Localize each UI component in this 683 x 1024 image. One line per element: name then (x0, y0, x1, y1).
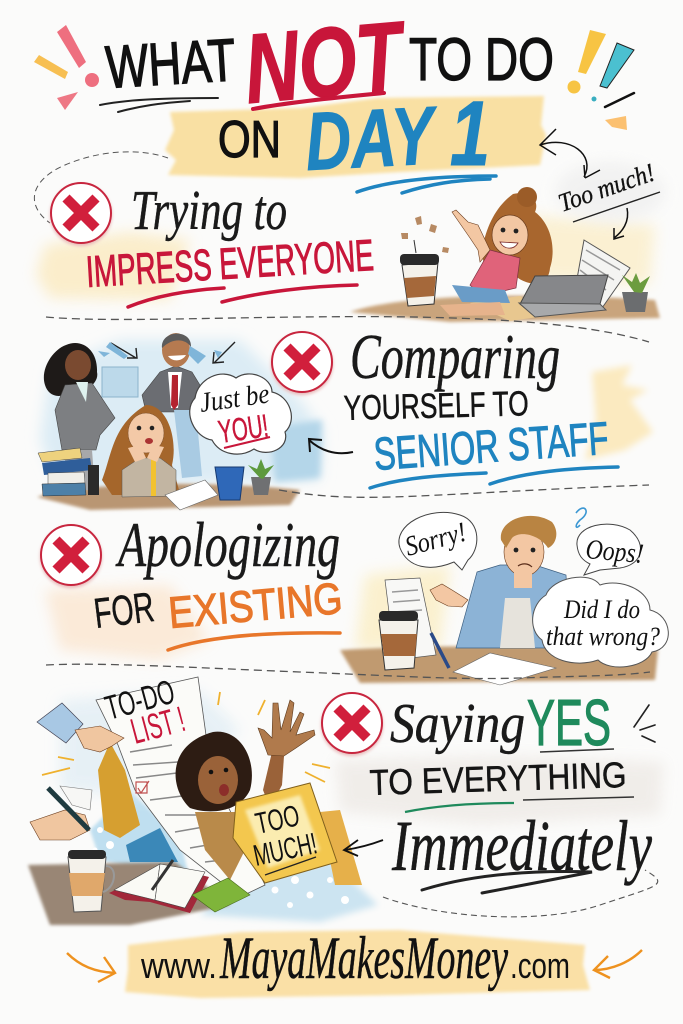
dashed loop (34, 152, 168, 223)
torso pink shirt (470, 250, 520, 296)
blue office wash (40, 340, 322, 490)
heading: existing: EXISTING (167, 574, 344, 638)
window (270, 420, 322, 482)
icon: red x badge (50, 183, 112, 246)
arrow to title (540, 129, 600, 178)
hair bun (517, 187, 537, 207)
arrow to folder (344, 840, 383, 856)
hair (176, 732, 252, 811)
coffee cup (379, 611, 418, 670)
coffee cup (68, 850, 114, 912)
alert sparks (42, 692, 330, 782)
blue cup (215, 467, 244, 500)
office screen (102, 367, 138, 397)
coffee cup (400, 240, 439, 306)
heading: impress everyone: IMPRESS EVERYONE (85, 231, 375, 297)
did i do that wrong bubble (533, 577, 668, 667)
stack of books (38, 448, 99, 496)
desk (340, 646, 658, 683)
title block (100, 0, 554, 193)
blue skirt (126, 828, 178, 862)
section divider 1 (46, 317, 649, 342)
list lines (130, 745, 240, 862)
jeans and legs (452, 285, 510, 303)
face (198, 756, 238, 804)
pen (431, 633, 449, 668)
grey bubble shade (555, 162, 665, 222)
pointing arm (452, 210, 490, 262)
newspaper lines (580, 250, 620, 290)
hair back (482, 193, 553, 284)
dashed curve (383, 870, 658, 917)
callout text: Too much! (555, 158, 659, 218)
green book (192, 878, 250, 912)
oops bubble (577, 524, 645, 575)
you: YOU! (216, 407, 270, 450)
yellow fabric (98, 742, 140, 838)
orange arrow right (594, 950, 642, 978)
orange wash (45, 585, 210, 660)
red underline strokes (128, 285, 357, 307)
section divider 2 (279, 485, 649, 497)
potted plant (248, 459, 274, 495)
laptop (520, 275, 608, 314)
arrow to laptop (614, 208, 628, 239)
panel: apologizing (40, 508, 668, 685)
floor (350, 296, 660, 322)
illustration: overwhelmed woman (28, 673, 378, 925)
did i do that wrong bubble: that wrong? (546, 622, 660, 651)
raised hand (258, 700, 315, 756)
document lines (392, 590, 422, 612)
list text: LIST ! (126, 698, 189, 752)
icon: red x badge (271, 332, 333, 395)
heading: saying: Saying (390, 693, 525, 755)
title: day 1: DAY (303, 90, 441, 188)
face (492, 215, 528, 255)
yellow wash right (585, 365, 653, 460)
underline (573, 192, 660, 222)
just be: Just be (198, 378, 271, 419)
title: on: ON (218, 111, 281, 169)
arrow to cloud scene (309, 439, 353, 453)
heading: to everything: TO EVERYTHING (369, 754, 627, 803)
yellow brush band behind title (165, 96, 546, 178)
sun stripes (520, 215, 655, 285)
small arrows (111, 342, 235, 363)
splash speckles (92, 822, 349, 908)
table (28, 862, 230, 925)
pale blue backdrop (60, 690, 240, 800)
heading rules (405, 749, 634, 812)
man standing (142, 333, 206, 478)
raised arm (263, 752, 284, 808)
woman standing (44, 343, 115, 490)
section divider 3 (46, 664, 650, 679)
yellow brush band (125, 930, 590, 998)
blue splash (90, 790, 190, 880)
face (504, 528, 544, 576)
decorative exclamation left (34, 25, 99, 110)
plant (622, 273, 650, 312)
red underline under not (253, 93, 384, 109)
blue underline strokes (370, 467, 618, 488)
too much folder: TOO (253, 799, 302, 841)
young woman dreaming (102, 405, 179, 497)
title: to do: TO DO (409, 26, 554, 93)
url: www: www. (140, 945, 217, 986)
title: not: NOT (240, 0, 412, 124)
too much folder (233, 783, 337, 883)
lower hand with pen (30, 786, 92, 840)
sorry bubble: Sorry! (402, 517, 470, 563)
top hand with sleeve (37, 703, 124, 752)
panel: impress everyone (34, 129, 665, 322)
yellow wash behind heading (36, 232, 190, 300)
did i do that wrong bubble: Did I do (563, 595, 640, 624)
decorative exclamation right (568, 30, 634, 130)
title: what: WHAT (104, 26, 238, 101)
icon: red x badge (321, 693, 383, 756)
yellow rays (355, 565, 450, 650)
blue papers flying (98, 342, 222, 364)
illustration: apologetic man at desk (340, 508, 668, 685)
heading: comparing: Comparing (350, 321, 560, 392)
body (195, 812, 245, 880)
url: com: .com (510, 945, 570, 986)
icon: red x badge (40, 525, 102, 588)
red underline (224, 437, 270, 448)
heading: apologizing: Apologizing (115, 509, 340, 580)
heading: yourself to: YOURSELF TO (343, 384, 529, 428)
heading: for: FOR (91, 583, 157, 637)
accent ticks (634, 705, 655, 742)
paper confetti (401, 216, 449, 253)
grey wash (335, 755, 664, 825)
black underline under what (100, 98, 218, 112)
callout: too much (540, 129, 665, 239)
raised hand (430, 584, 468, 607)
footer website banner (67, 925, 642, 998)
open notebook (109, 860, 209, 913)
long to-do list (96, 673, 265, 897)
to-do text: TO-DO (101, 673, 179, 728)
orange underline (168, 633, 340, 650)
jacket (456, 565, 570, 648)
panel: saying yes (28, 673, 664, 925)
oops bubble: Oops! (584, 534, 645, 570)
title: number one: 1 (450, 83, 490, 185)
paper on desk (165, 480, 218, 510)
too much folder: MUCH! (251, 827, 320, 873)
open newspaper (575, 240, 630, 308)
shirt (500, 598, 535, 648)
wood desk (37, 484, 300, 510)
orange arrow left (67, 953, 115, 982)
heading: trying to: Trying to (131, 180, 287, 242)
worried scribble (576, 508, 586, 527)
paper stack on floor (470, 296, 545, 321)
panel: comparing yourself (37, 321, 653, 510)
thought cloud: just be you (190, 374, 291, 454)
illustration: senior staff scene (37, 333, 322, 510)
heading: yes: YES (527, 686, 611, 759)
url: mayamakesmoney: MayaMakesMoney (219, 925, 508, 991)
check box (136, 781, 149, 793)
brush swashes (422, 872, 592, 893)
desk paper (453, 653, 556, 685)
blue swoosh under day 1 (357, 176, 496, 193)
document (385, 578, 436, 660)
illustration: overworked woman with laptop (350, 187, 660, 322)
hair (501, 516, 556, 548)
